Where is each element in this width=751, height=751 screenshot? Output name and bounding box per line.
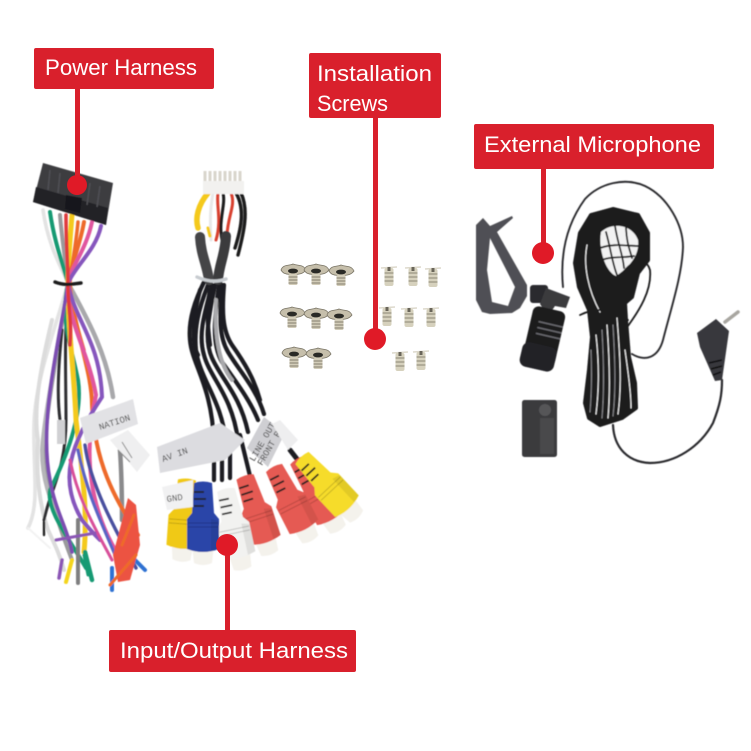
microphone cord tie	[580, 261, 650, 330]
tape label: line out front	[247, 417, 285, 468]
callout: power harness	[34, 48, 214, 195]
adhesive mount	[522, 400, 557, 457]
orange wire ends	[110, 515, 136, 585]
microphone lower cord	[613, 380, 722, 463]
callout: input/output harness: Input/Output Harness	[120, 638, 348, 663]
tape label: small flag	[272, 420, 298, 450]
callout: input/output harness	[109, 534, 356, 672]
tape label: navigation: NATION	[98, 413, 132, 433]
tape label: small side tag	[57, 420, 65, 444]
red wire connector	[113, 498, 140, 582]
cable tie on power harness	[55, 282, 81, 284]
callout: external microphone: External Microphone	[484, 132, 701, 157]
microphone swivel neck	[530, 285, 570, 316]
connector: power harness plug	[33, 163, 113, 225]
microphone head	[518, 305, 566, 373]
black wires of io harness	[190, 280, 304, 480]
power harness wires	[28, 210, 145, 590]
tape label: navigation	[80, 399, 138, 444]
rca plugs	[165, 446, 370, 574]
connector: white multi-pin plug	[203, 171, 244, 194]
microphone coiled cable	[575, 209, 648, 425]
callout: external microphone	[474, 124, 714, 264]
heat-shrink tubes	[200, 236, 226, 280]
input/output harness	[157, 171, 370, 574]
visor clip	[476, 216, 527, 314]
screws: dark head group	[280, 264, 354, 369]
installation screws	[280, 264, 441, 371]
tape label: white flag	[110, 430, 150, 472]
callout: installation screws: Installation	[317, 61, 432, 86]
external microphone	[476, 182, 738, 463]
tape label: av in: AV IN	[161, 446, 189, 465]
screws: threaded group	[379, 267, 441, 371]
power harness	[28, 163, 150, 590]
callout: installation screws	[309, 53, 441, 350]
microphone thin cord loop	[562, 182, 683, 358]
upper wires to white connector	[197, 193, 245, 255]
tape label: line out front: LINE OUT	[248, 421, 279, 464]
callout: installation screws: Screws	[317, 91, 388, 116]
tape label: av in	[157, 423, 245, 473]
tape label: line out front: FRONT R	[256, 429, 284, 468]
callout: power harness: Power Harness	[45, 55, 197, 80]
microphone jack plug	[697, 312, 738, 381]
cable tie on io harness	[197, 277, 226, 281]
tape label: gnd	[162, 480, 193, 510]
tape label: gnd: GND	[166, 493, 183, 505]
